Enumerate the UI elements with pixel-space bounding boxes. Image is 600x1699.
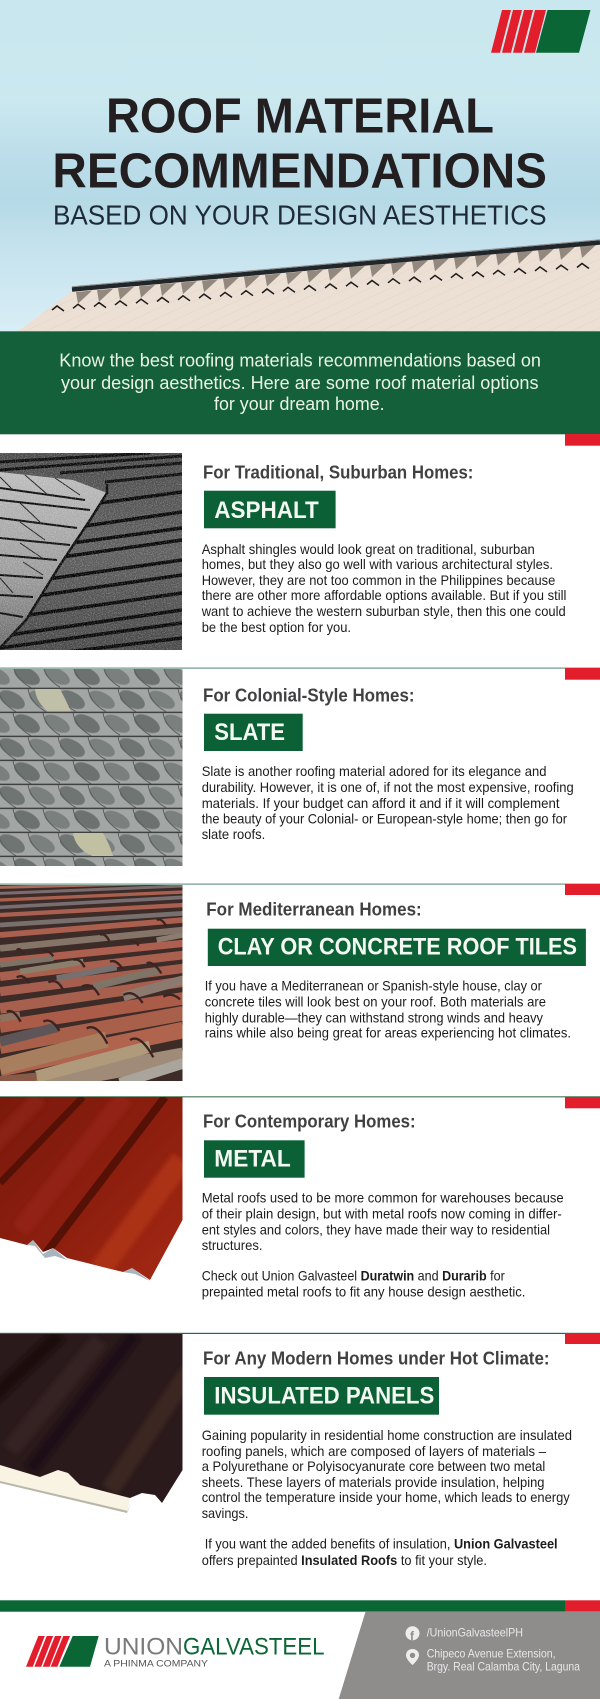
heading: For Traditional, Suburban Homes: [203, 461, 473, 482]
intro text: for your dream home. [214, 394, 385, 414]
body text: highly durable—they can withstand strong winds and heavy [205, 1011, 543, 1026]
badge: insulated panels [204, 1377, 439, 1415]
divider line [0, 1333, 600, 1334]
address: Chipeco Avenue Extension, [427, 1647, 556, 1661]
intro text: Know the best roofing materials recommendations based on [59, 351, 541, 371]
sky photo background [0, 0, 600, 332]
address: Brgy. Real Calamba City, Laguna [427, 1660, 580, 1674]
red tab [565, 668, 600, 680]
body text [202, 1191, 564, 1300]
red tab [565, 434, 600, 446]
badge: metal: METAL [214, 1146, 291, 1173]
body text: Metal roofs used to be more common for warehouses because [202, 1191, 564, 1206]
badge: insulated panels: INSULATED PANELS [214, 1382, 434, 1409]
heading: For Mediterranean Homes: [206, 899, 422, 920]
body text [201, 542, 566, 635]
footer colour bar [0, 1600, 600, 1612]
company logo: A PHINMA COMPANY [104, 1659, 208, 1669]
footer [0, 1600, 600, 1699]
body text [205, 979, 571, 1041]
divider line [0, 1096, 600, 1097]
section: slate [0, 668, 600, 866]
photo: slate tiles [0, 669, 182, 866]
badge: asphalt [204, 491, 336, 528]
body text: Asphalt shingles would look great on traditional, suburban [202, 542, 535, 557]
divider line [0, 668, 600, 669]
title: BASED ON YOUR DESIGN AESTHETICS [53, 200, 546, 231]
body text [202, 1428, 572, 1568]
body text: ent styles and colors, they have made their way to residential [202, 1223, 550, 1238]
heading: For Any Modern Homes under Hot Climate: [203, 1347, 550, 1368]
body text: If you want the added benefits of insulation, Union Galvasteel [205, 1537, 558, 1552]
body text: Slate is another roofing material adored for its elegance and [202, 764, 546, 779]
section: metal [0, 1096, 600, 1300]
divider line [0, 884, 600, 885]
intro band [0, 331, 600, 434]
red tab [565, 1097, 600, 1108]
title: RECOMMENDATIONS [52, 145, 547, 199]
section: insulated panels [0, 1333, 600, 1568]
body text: control the temperature inside your home, which leads to energy [202, 1490, 570, 1505]
body text: rains while also being great for areas experiencing hot climates. [205, 1026, 571, 1041]
body text: materials. If your budget can afford it and if it will complement [202, 796, 560, 811]
body text: sheets. These layers of materials provide insulation, helping [202, 1475, 544, 1490]
company logo: GALVASTEEL [183, 1633, 324, 1660]
body text: of their plain design, but with metal roofs now coming in differ- [202, 1207, 562, 1222]
body text: If you have a Mediterranean or Spanish-style house, clay or [205, 979, 542, 994]
section: asphalt [0, 434, 600, 660]
red tab [565, 1333, 600, 1344]
title: ROOF MATERIAL [106, 90, 494, 144]
body text: Gaining popularity in residential home construction are insulated [202, 1428, 572, 1443]
badge: slate: SLATE [214, 719, 285, 746]
body text: concrete tiles will look best on your roof. Both materials are [205, 995, 546, 1010]
body text: durability. However, it is one of, if not the most expensive, roofing [202, 780, 574, 795]
body text: want to achieve the western suburban style, then this one could [201, 604, 566, 619]
body text: roofing panels, which are composed of layers of materials – [202, 1444, 546, 1459]
company logo [26, 1633, 324, 1669]
body text: savings. [202, 1506, 248, 1521]
brand mark top right [491, 10, 590, 53]
heading: For Contemporary Homes: [203, 1111, 416, 1132]
badge: clay or concrete roof tiles [208, 929, 586, 966]
grey contact panel [339, 1612, 600, 1699]
intro text: your design aesthetics. Here are some roof material options [61, 373, 538, 393]
body text: homes, but they also go well with various architectural styles. [202, 557, 553, 572]
body text: the beauty of your Colonial- or European-style home; then go for [202, 811, 567, 826]
badge: metal [204, 1140, 305, 1178]
photo: insulated panel [0, 1334, 190, 1513]
body text: offers prepainted Insulated Roofs to fit your style. [202, 1553, 487, 1568]
body text: a Polyurethane or Polyisocyanurate core between two metal [202, 1459, 545, 1474]
facebook handle: /UnionGalvasteelPH [427, 1626, 523, 1640]
body text: structures. [202, 1238, 262, 1253]
red tab [565, 884, 600, 895]
body text [202, 764, 574, 842]
icon: facebook: f [410, 1629, 415, 1643]
badge: asphalt: ASPHALT [214, 497, 319, 524]
body text: there are other more affordable options available. But if you still [202, 588, 566, 603]
body text: prepainted metal roofs to fit any house design aesthetic. [202, 1285, 525, 1300]
body text: be the best option for you. [202, 620, 351, 635]
icon: facebook [406, 1626, 420, 1643]
photo: metal roof sheet [0, 1097, 183, 1287]
heading: For Colonial-Style Homes: [203, 684, 414, 705]
body text: However, they are not too common in the Philippines because [202, 573, 555, 588]
badge: slate [204, 714, 303, 751]
photo: asphalt shingles [0, 453, 182, 660]
icon: location pin [406, 1649, 419, 1665]
body text: Check out Union Galvasteel Duratwin and Durarib for [202, 1269, 505, 1284]
company logo: UNION [104, 1633, 183, 1660]
body text: slate roofs. [202, 827, 265, 842]
address [427, 1647, 580, 1674]
section: clay or concrete tiles [0, 883, 600, 1090]
roof photo [17, 240, 600, 332]
intro text [59, 351, 541, 414]
header panel [0, 0, 600, 332]
title [52, 90, 547, 231]
photo: roof tiles [0, 883, 183, 1090]
